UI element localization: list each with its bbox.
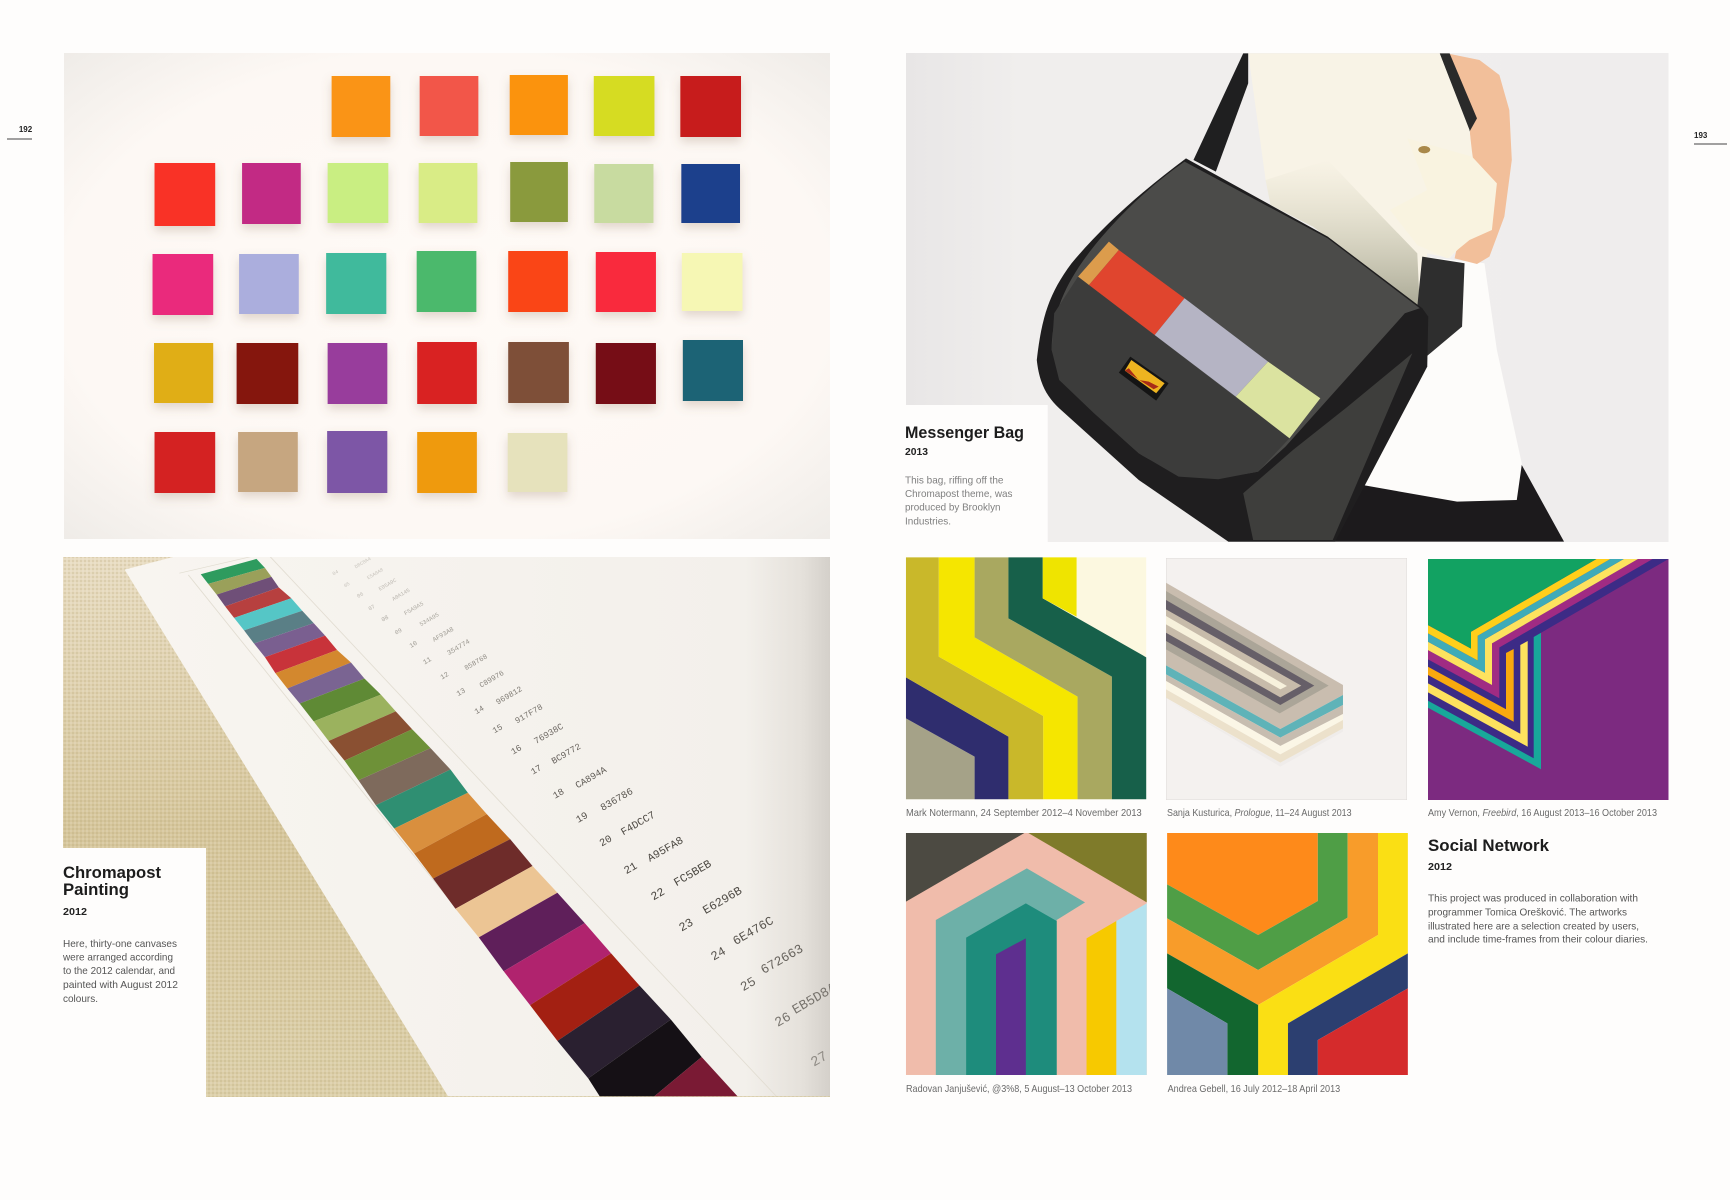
handwritten colour codes: 27 <box>808 1049 831 1071</box>
handwritten colour codes: 858768 <box>464 653 489 673</box>
handwritten colour codes: A95FA8 <box>646 835 686 865</box>
handwritten colour codes: 08 <box>380 614 390 624</box>
panel: messenger bag photo <box>906 53 1668 542</box>
flap dark lower half <box>1052 277 1289 479</box>
handwritten colour codes: 16 <box>510 743 524 757</box>
caption: Andrea Gebell: Andrea Gebell, 16 July 2012–18 April 2013 <box>1168 1083 1340 1095</box>
paper sheet <box>125 555 830 1096</box>
handwritten colour codes: 21 <box>622 861 640 878</box>
text block: Social Network: and include time-frames from their colour diaries. <box>1428 934 1648 946</box>
handwritten colour codes: 25 <box>738 974 759 995</box>
paper border lines <box>179 555 776 1096</box>
handwritten colour codes: E5A0A8 <box>366 567 385 581</box>
handwritten colour codes: 14 <box>473 704 486 717</box>
handwritten colour codes: CA894A <box>574 764 609 791</box>
text block: Chromapost Painting: Chromapost <box>63 864 162 882</box>
handwritten colour codes: 06 <box>356 591 365 600</box>
handwritten colour codes: F4DCC7 <box>619 810 658 839</box>
text block: Chromapost Painting: to the 2012 calendar, and <box>63 965 175 977</box>
handwritten colour codes: 07 <box>367 603 376 612</box>
handwritten colour codes: 20 <box>598 833 615 850</box>
caption: Sanja Kusturica: Sanja Kusturica, Prologue, 11–24 August 2013 <box>1167 807 1352 819</box>
bag body <box>1037 158 1428 542</box>
handwritten colour codes: E05A9C <box>377 576 398 593</box>
bag lower panel <box>1243 353 1412 540</box>
rolled sleeve <box>1446 158 1497 258</box>
handwritten colour codes: 969812 <box>495 685 524 707</box>
handwritten colour codes: 22 <box>649 886 667 904</box>
text block: Chromapost Painting: Here, thirty-one canvases <box>63 938 177 950</box>
handwritten colour codes: 23 <box>677 916 696 935</box>
handwritten colour codes: 18 <box>551 786 567 801</box>
handwritten colour codes: 836786 <box>599 786 635 814</box>
handwritten colour codes: A0A145 <box>391 587 411 603</box>
text block: Social Network: programmer Tomica Orešković. The artworks <box>1428 906 1627 918</box>
panel: chromapost painting photo <box>63 555 840 1097</box>
white shirt lower and skirt <box>1353 257 1522 502</box>
text block: Chromapost Painting: 2012 <box>63 907 87 918</box>
shoulder strap <box>1193 53 1248 172</box>
handwritten colour codes: 15 <box>491 722 505 736</box>
text block: Social Network <box>1428 837 1648 946</box>
text block: Chromapost Painting: colours. <box>63 993 98 1005</box>
handwritten colour codes: 19 <box>574 810 590 826</box>
text block: Social Network: illustrated here are a selection created by users, <box>1428 920 1639 932</box>
rear strap <box>1440 53 1477 132</box>
colour strip of daily swatches <box>201 559 737 1096</box>
brand label <box>1119 357 1169 401</box>
caption: Radovan Janjušević: Radovan Janjušević, @3%8, 5 August–13 October 2013 <box>906 1083 1132 1095</box>
handwritten colour codes: 354774 <box>446 638 472 658</box>
text block: Messenger Bag: produced by Brooklyn <box>905 502 1001 514</box>
handwritten colour codes: 11 <box>422 656 433 667</box>
handwritten colour codes: 12 <box>439 671 451 682</box>
text block: Messenger Bag: 2013 <box>905 447 928 458</box>
artwork: Amy Vernon, Freebird <box>1428 559 1668 800</box>
handwritten colour codes: 76938C <box>533 722 565 747</box>
handwritten colour codes: F5A9A5 <box>403 600 425 617</box>
text block: Social Network: This project was produced in collaboration with <box>1428 892 1638 904</box>
handwritten colour codes: E6296B <box>701 884 745 918</box>
handwritten colour codes: 17 <box>529 763 544 777</box>
shirt shadow <box>1267 183 1419 304</box>
handwritten colour codes: D8C8A4 <box>354 556 372 570</box>
side strap <box>1417 257 1465 360</box>
text block: Chromapost Painting: Painting <box>63 881 129 899</box>
handwritten colour codes: 534A95 <box>418 611 441 628</box>
handwritten colour codes: 6E476C <box>731 914 776 949</box>
handwritten colour codes: EB5D8A <box>790 981 840 1018</box>
handwritten colour codes: C89976 <box>479 670 506 690</box>
caption: Amy Vernon: Amy Vernon, Freebird, 16 August 2013–16 October 2013 <box>1428 807 1657 819</box>
page number 193: 193 <box>1694 131 1708 140</box>
button <box>1418 146 1430 153</box>
handwritten colour codes <box>332 556 840 1071</box>
handwritten colour codes: 09 <box>394 627 404 637</box>
page number 192: 192 <box>19 125 33 134</box>
canvases: calendar of colour swatches <box>153 75 743 493</box>
cream shirt <box>1248 54 1473 284</box>
colour strip on flap <box>1078 242 1320 438</box>
text block: Chromapost Painting: were arranged according <box>62 952 173 964</box>
artwork: Sanja Kusturica, Prologue <box>1165 558 1407 800</box>
handwritten colour codes: 05 <box>343 581 351 589</box>
text block: Chromapost Painting: painted with August 2012 <box>63 979 178 991</box>
black trousers <box>1228 465 1564 542</box>
handwritten colour codes: BC9772 <box>550 742 583 767</box>
handwritten colour codes: 04 <box>332 569 340 577</box>
text block: Chromapost Painting <box>62 848 206 1098</box>
handwritten colour codes: AF93A8 <box>431 626 455 644</box>
text block: Messenger Bag <box>900 405 1048 547</box>
handwritten colour codes: FC5BEB <box>672 858 714 890</box>
page number 193 <box>1694 131 1727 144</box>
handwritten colour codes: 672663 <box>758 941 806 978</box>
canvas backdrop <box>63 557 830 1097</box>
text block: Social Network: 2012 <box>1428 862 1452 873</box>
text block: Messenger Bag: Messenger Bag <box>905 424 1024 442</box>
text block: Messenger Bag: Industries. <box>905 516 951 528</box>
handwritten colour codes: 26 <box>773 1010 794 1031</box>
page number 192 <box>7 125 33 140</box>
bag flap <box>1052 162 1420 476</box>
text block: Messenger Bag: This bag, riffing off the <box>905 474 1004 486</box>
artwork: Andrea Gebell <box>1167 833 1408 1075</box>
artwork: Mark Notermann <box>906 557 1146 799</box>
handwritten colour codes: 917F78 <box>513 702 545 726</box>
handwritten colour codes: 24 <box>709 945 729 964</box>
artwork: Radovan Janjušević <box>906 833 1147 1075</box>
panel: grid of painted canvases photo <box>64 53 830 539</box>
handwritten colour codes: 13 <box>456 687 468 699</box>
arm <box>1447 53 1512 264</box>
caption: Mark Notermann: Mark Notermann, 24 September 2012–4 November 2013 <box>906 807 1142 819</box>
handwritten colour codes: 10 <box>408 640 419 650</box>
text block: Social Network: Social Network <box>1428 837 1550 855</box>
text block: Messenger Bag: Chromapost theme, was <box>905 488 1012 500</box>
